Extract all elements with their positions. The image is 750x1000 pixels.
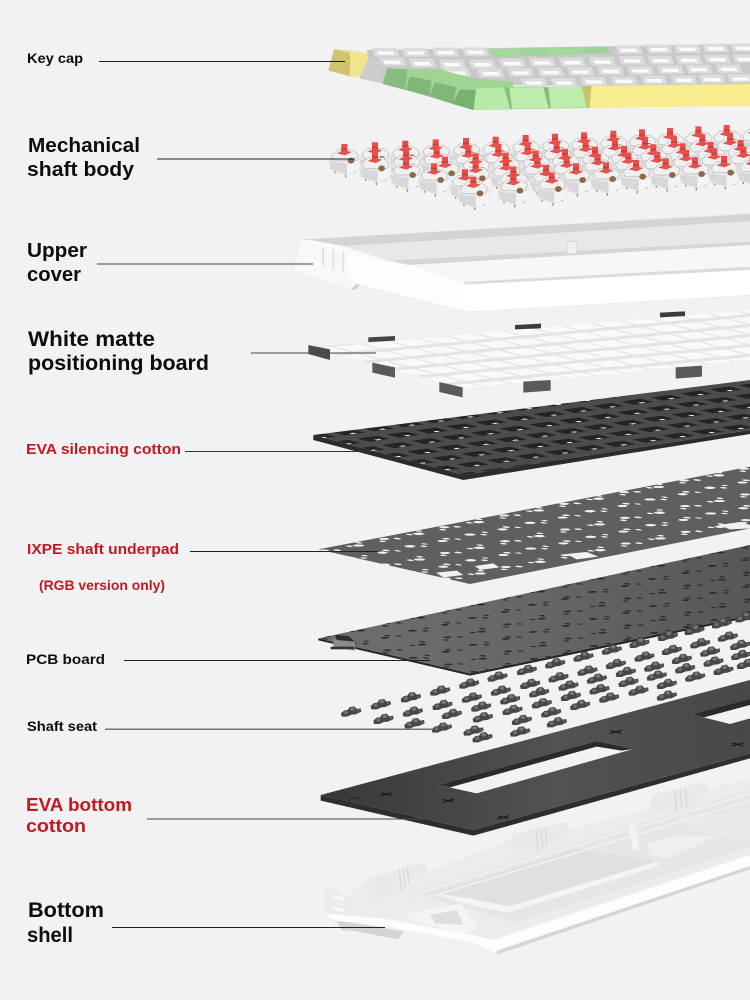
cotton edge [313,430,750,480]
label: EVA bottom cotton: cotton [26,816,86,836]
board edge [318,615,750,676]
seam [347,797,362,806]
notch shadow [352,284,360,290]
cover clips [323,247,343,272]
label: bottom shell: Bottom [28,899,104,922]
seat row 4 [432,650,750,733]
shell body [323,778,750,954]
key cap layer [328,43,750,110]
label: upper cover: Upper [27,240,87,262]
label: white matte positioning board [28,328,376,375]
label: mechanical shaft body: Mechanical [28,135,140,157]
yellow bar end [582,86,592,108]
label: mechanical shaft body [27,135,355,181]
green top row keys [487,47,611,57]
left compartment [407,904,477,935]
left face [345,253,467,312]
label: bottom shell [27,899,385,947]
seat row 5 [463,659,750,736]
label: IXPE shaft underpad: IXPE shaft underpad [27,542,179,558]
opening [408,245,750,283]
label: IXPE shaft underpad [27,542,378,593]
cover outer frame [293,213,750,312]
label: PCB board: PCB board [26,651,105,667]
back rail [407,793,750,902]
bottom shell [323,778,750,955]
inner floor [410,790,750,923]
connector [331,635,355,651]
inner edge line [390,242,750,265]
clip ribs [399,789,687,892]
label: EVA bottom cotton: EVA bottom [26,795,132,815]
label: bottom shell: shell [27,924,73,947]
seat row 2 [373,631,738,724]
IXPE shaft underpad [318,467,750,584]
label: IXPE shaft underpad: (RGB version only) [39,577,165,593]
row 6 [457,172,568,210]
battery panel [433,848,657,907]
inner back wall [343,221,750,262]
seat row 3 [404,640,750,728]
window wall [438,741,633,787]
center tray [647,835,717,858]
clips [368,782,708,900]
row 1 [328,124,750,177]
key row 4 [521,74,750,87]
back clip [567,242,577,254]
key row 3 [444,64,742,77]
front rail top [463,267,750,285]
row 5 [449,155,750,203]
bottom cotton edge [321,753,750,836]
white matte positioning board [308,310,750,397]
gray keycaps base [359,44,750,87]
mechanical switch layer [328,124,750,210]
shaft seats [341,612,750,742]
board spots [318,545,750,673]
label: white matte positioning board: White matte [28,328,155,351]
label: white matte positioning board: positioning board [28,352,209,375]
right panel [677,808,750,840]
label: EVA bottom cotton [26,795,430,836]
plate grid [310,310,750,388]
yellow corner keycap [328,49,371,77]
label: shaft seat: Shaft seat [27,718,97,734]
green keycaps [383,68,587,110]
window wall right [692,699,750,717]
label: upper cover: cover [27,264,81,286]
front face [457,270,750,312]
left end slots [333,897,345,911]
row 2 [359,134,747,185]
yellow space bar [582,84,750,108]
front rim [323,855,750,954]
back wall [307,214,750,246]
PCB board [318,545,750,676]
key row 1 [372,43,750,57]
label: key cap: Key cap [27,50,83,66]
label: mechanical shaft body: shaft body [27,159,135,181]
upper cover [293,213,750,312]
seat row 1 [341,612,750,717]
EVA bottom cotton [321,680,750,836]
cotton lattice [313,380,750,475]
plate tabs [308,311,702,397]
screw crosses [381,730,744,819]
EVA silencing cotton [313,380,750,480]
gray side [359,58,383,83]
pad slots [436,522,750,577]
label: upper cover [27,240,313,286]
left foot [337,921,403,939]
label: EVA silencing cotton: EVA silencing cotton [26,442,181,458]
bottom cotton face with windows [321,680,750,830]
row 3 [390,140,750,192]
row 4 [418,147,750,197]
key row 2 [379,54,750,68]
seat row 6 [472,690,677,742]
center post [628,824,640,851]
